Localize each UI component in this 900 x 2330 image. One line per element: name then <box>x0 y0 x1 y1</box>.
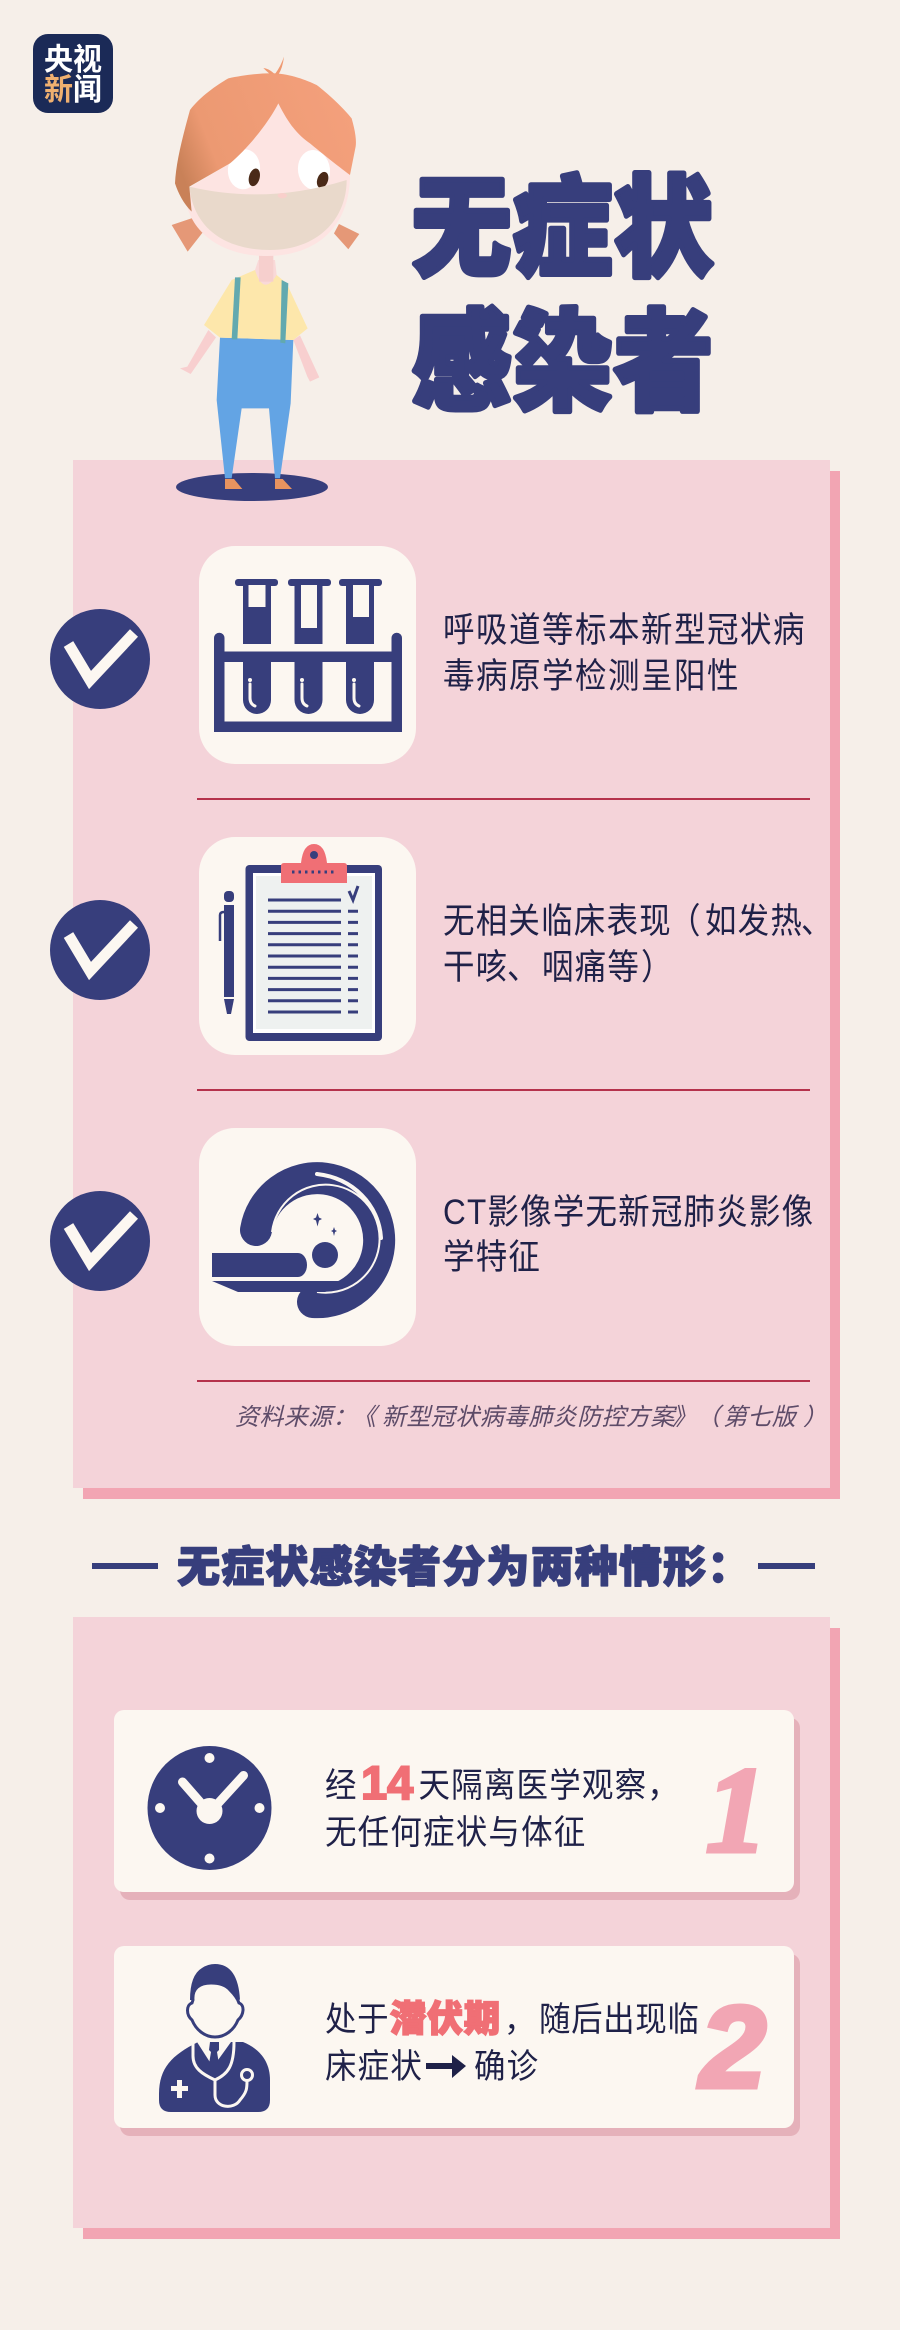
text: criterion 3 <box>443 1193 814 1277</box>
section heading: 无症状感染者分为两种情形： <box>177 1544 752 1592</box>
text: situation 2: ， <box>504 2002 537 2038</box>
title: 无症状 <box>412 168 715 291</box>
character: girl with mask <box>172 57 359 501</box>
text: situation 1: 经 <box>325 1766 358 1804</box>
divider 3 <box>197 1380 810 1382</box>
icon card: CT scanner <box>199 1128 416 1346</box>
number 1: 1 <box>706 1743 767 1878</box>
divider 2 <box>197 1089 810 1091</box>
number 2: 2 <box>698 1982 766 2112</box>
text: situation 1: 无任何症状与体征 <box>325 1813 586 1851</box>
icon card: clipboard <box>199 837 416 1055</box>
logo: CCTV news: 央视 <box>44 43 102 77</box>
source note: 《 <box>352 1404 381 1431</box>
shadow ellipse <box>176 473 328 501</box>
check badge 3 <box>50 1191 150 1291</box>
text: criterion 2: 咽痛等 <box>542 948 640 987</box>
logo: CCTV news: 新闻 <box>44 73 102 107</box>
source note: ） <box>803 1404 827 1431</box>
divider 1 <box>197 798 810 800</box>
title <box>412 168 715 425</box>
logo: CCTV news <box>33 34 113 113</box>
text: situation 2: 床症状 <box>325 2047 423 2085</box>
text: criterion 1: 呼吸道等标本新型冠状病 <box>443 611 806 650</box>
text: situation 2: 处于 <box>325 2000 389 2038</box>
text: criterion 2: 、 <box>801 902 834 941</box>
icon card: test tubes <box>199 546 416 764</box>
text: criterion 1 <box>443 611 806 696</box>
text: situation 2: 确诊 <box>474 2047 539 2085</box>
text: criterion 2: 干咳 <box>443 948 508 987</box>
text: criterion 2: 无相关临床表现 <box>443 902 672 941</box>
source note: 新型冠状病毒肺炎防控方案 <box>382 1404 677 1431</box>
text: criterion 2: 、 <box>507 948 540 987</box>
panel: two situations <box>73 1617 840 2239</box>
text: situation 1: 天隔离医学观察， <box>418 1766 680 1804</box>
text: criterion 1: 毒病原学检测呈阳性 <box>443 657 740 696</box>
text: situation 1: 14 <box>361 1756 413 1809</box>
panel: criteria <box>73 460 840 1499</box>
icon: clock <box>148 1746 272 1870</box>
text: criterion 2 <box>443 902 834 987</box>
card 2 <box>114 1946 800 2136</box>
text: situation 2: 潜伏期 <box>390 1998 501 2039</box>
body <box>180 260 319 489</box>
text: criterion 2: 如发热 <box>705 902 803 941</box>
check badge 1 <box>50 609 150 709</box>
text: criterion 3: 学特征 <box>443 1238 541 1277</box>
text: situation 2 <box>325 1998 699 2085</box>
card 1 <box>114 1710 800 1900</box>
arrow <box>426 2055 466 2078</box>
text: criterion 2: ） <box>641 948 674 987</box>
text: criterion 3: CT影像学无新冠肺炎影像 <box>443 1193 814 1232</box>
source note: （ <box>696 1404 724 1431</box>
check badge 2 <box>50 900 150 1000</box>
title: 感染者 <box>412 302 715 425</box>
source note: 资料来源： <box>235 1404 357 1431</box>
source note: 》 <box>672 1404 696 1431</box>
text: situation 1 <box>325 1756 680 1851</box>
head <box>172 57 359 282</box>
icon: doctor <box>159 1964 270 2112</box>
source note: 第七版 <box>723 1404 800 1431</box>
text: situation 2: 随后出现临 <box>539 2000 699 2038</box>
text: criterion 2: （ <box>669 902 702 941</box>
